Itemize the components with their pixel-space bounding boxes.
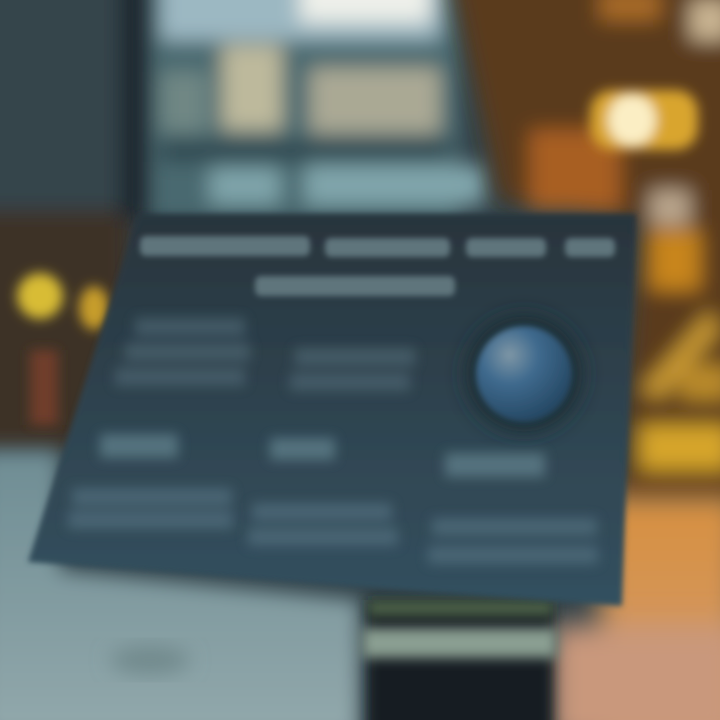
label row (100, 434, 545, 477)
icon: left yellow lights (17, 273, 109, 425)
central building through window (150, 0, 485, 220)
icon: hanging lamp (590, 90, 698, 150)
icon: globe (466, 316, 582, 432)
text block: bottom middle (248, 503, 398, 546)
floor (0, 450, 720, 720)
panel: information board (28, 214, 636, 606)
person holding the board (362, 600, 557, 720)
text block: bottom right (428, 518, 598, 564)
text block: upper middle (290, 348, 415, 391)
text block: bottom left (68, 488, 233, 529)
left building (0, 0, 152, 450)
right warm interior (450, 0, 720, 500)
heading (140, 236, 615, 296)
text block: upper left (115, 318, 250, 386)
